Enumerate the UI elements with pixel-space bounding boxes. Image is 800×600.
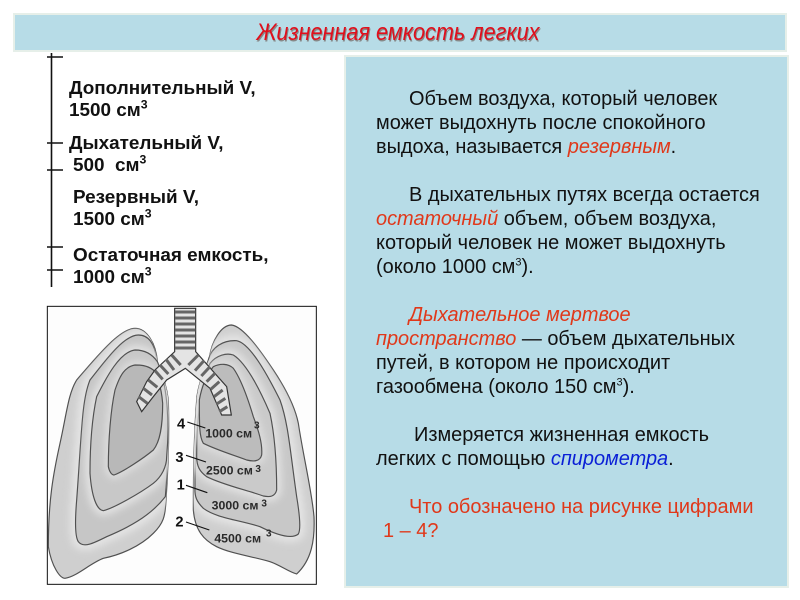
lung callouts: 2500 см — [206, 464, 253, 478]
label: tidal volume — [69, 133, 224, 176]
lung callouts: 2 — [175, 515, 183, 531]
lung callouts — [175, 416, 272, 545]
lung callouts: 3 — [261, 499, 267, 510]
lung callouts: 3 — [254, 421, 260, 432]
label: supplemental volume: 1500 см3 — [69, 98, 148, 121]
paragraph: spirometer: легких с помощью спирометра. — [376, 448, 674, 470]
paragraph: dead space: газообмена (около 150 см3). — [376, 376, 635, 398]
title: Жизненная емкость легких — [257, 19, 539, 46]
paragraph: dead space: пространство — объем дыхательных — [376, 328, 735, 350]
volume scale — [47, 53, 269, 288]
paragraph: dead space — [376, 304, 735, 398]
scale axis with ticks — [47, 53, 63, 287]
lung callouts: 3000 см — [212, 498, 258, 512]
lung callouts: 1 — [177, 478, 185, 494]
paragraph: residual volume: В дыхательных путях всегда остается — [409, 184, 760, 206]
label: reserve volume: 1500 см3 — [73, 207, 152, 230]
paragraph: dead space: путей, в котором не происходит — [376, 352, 670, 374]
lung callouts: 4 — [177, 416, 186, 432]
paragraph: residual volume: который человек не может выдохнуть — [376, 232, 726, 254]
paragraph: reserve volume — [376, 88, 718, 158]
lung callouts: 4500 см — [214, 531, 261, 545]
explanation panel — [344, 55, 789, 588]
left lung — [48, 328, 169, 578]
label: supplemental volume: Дополнительный V, — [69, 78, 256, 99]
paragraph: residual volume: остаточный объем, объем воздуха, — [376, 208, 716, 230]
label: reserve volume: Резервный V, — [73, 187, 199, 208]
diagram frame — [47, 306, 316, 584]
label: residual capacity: Остаточная емкость, — [73, 245, 269, 266]
label: residual capacity — [73, 245, 269, 288]
paragraph: dead space: Дыхательное мертвое — [409, 304, 631, 326]
lung callouts: 3 — [266, 529, 272, 540]
header band — [13, 13, 787, 52]
lung callouts: 3 — [255, 464, 261, 475]
paragraph: reserve volume: может выдохнуть после спокойного — [376, 112, 706, 134]
paragraph: residual volume: (около 1000 см3). — [376, 256, 534, 278]
paragraph: spirometer — [376, 424, 709, 470]
paragraph: spirometer: Измеряется жизненная емкость — [414, 424, 709, 446]
label: residual capacity: 1000 см3 — [73, 265, 152, 288]
label: supplemental volume — [69, 78, 256, 121]
question: Что обозначено на рисунке цифрами — [409, 496, 753, 518]
lung callouts: 1000 см — [205, 426, 252, 440]
paragraph: reserve volume: Объем воздуха, который человек — [409, 88, 717, 110]
lung callouts: 3 — [175, 450, 183, 466]
question: 1 – 4? — [383, 520, 438, 542]
label: tidal volume: 500 см3 — [73, 153, 146, 176]
right lung — [193, 325, 314, 574]
question — [383, 496, 753, 542]
lung diagram — [46, 306, 317, 585]
paragraph: reserve volume: выдоха, называется резервным. — [376, 136, 676, 158]
label: reserve volume — [73, 187, 199, 230]
label: tidal volume: Дыхательный V, — [69, 133, 224, 154]
trachea and bronchi — [137, 308, 231, 415]
paragraph: residual volume — [376, 184, 760, 278]
